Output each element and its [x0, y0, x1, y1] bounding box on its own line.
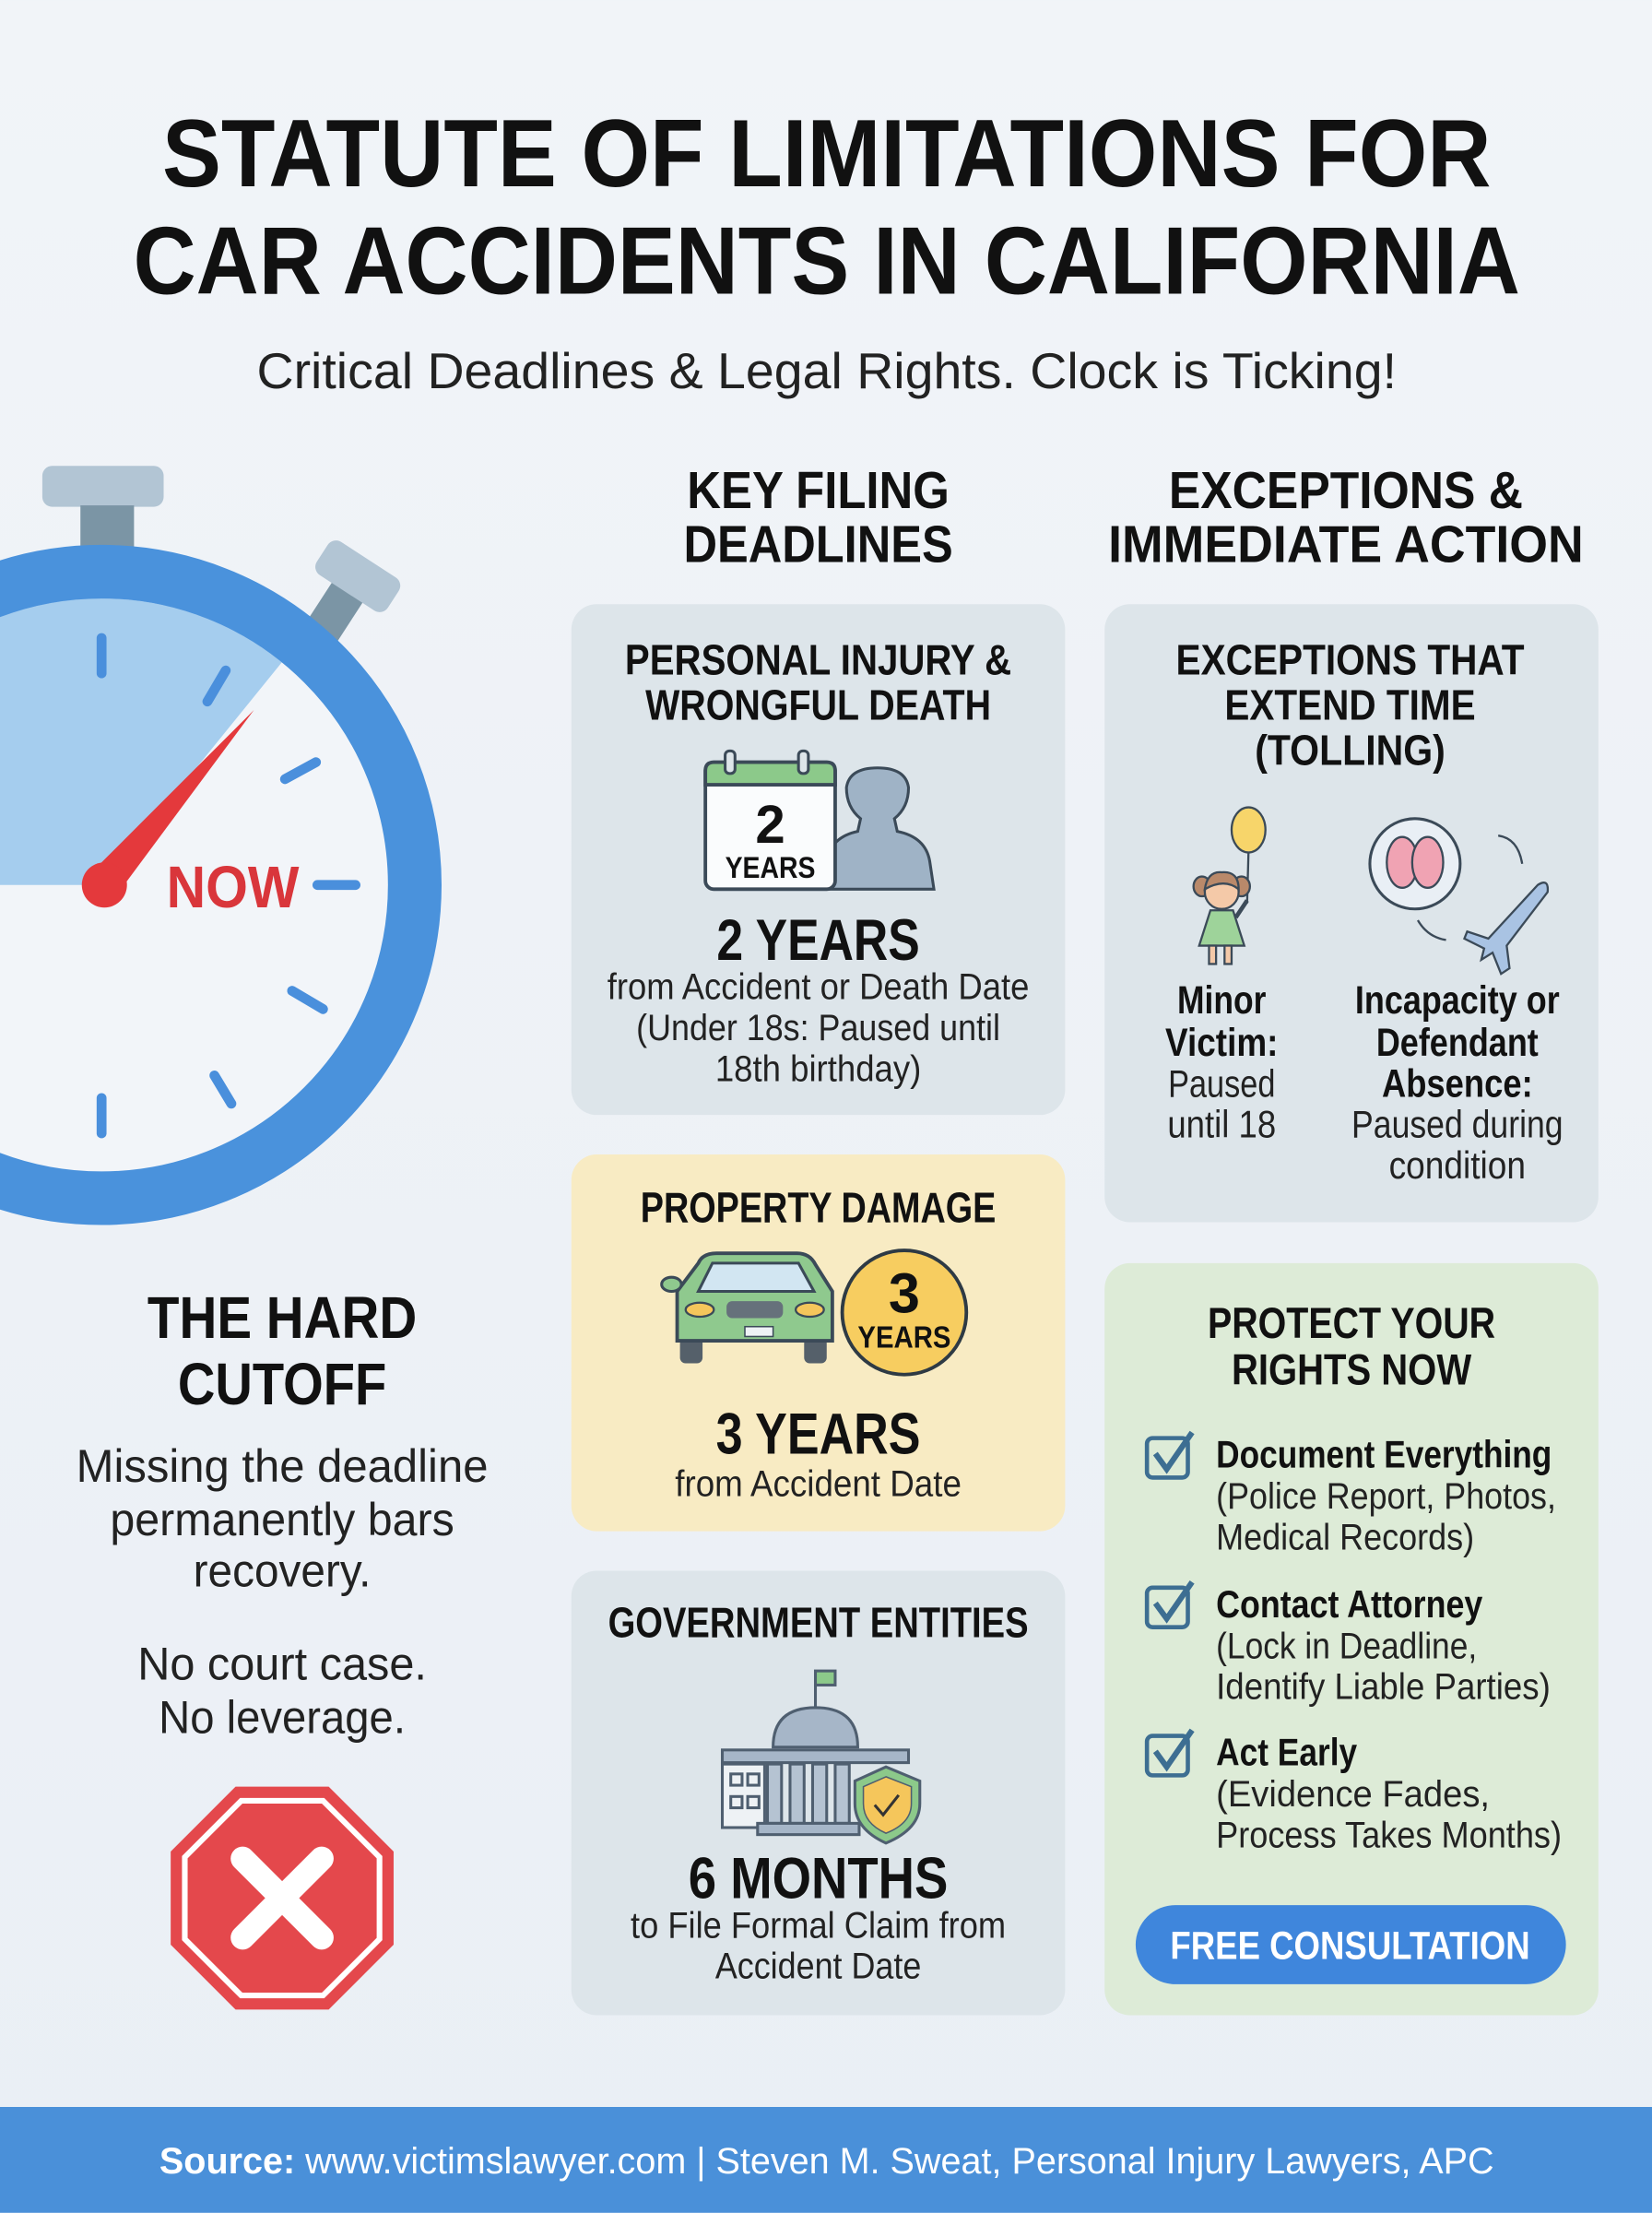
panel: government entities: GOVERNMENT ENTITIES — [608, 1598, 1029, 1646]
panel: exceptions (tolling): Paused during — [1351, 1104, 1564, 1146]
checklist item: act early: Act Early — [1216, 1732, 1357, 1774]
text block: the hard cutoff: Missing the deadline — [77, 1439, 488, 1492]
checklist item: contact attorney: (Lock in Deadline, — [1216, 1626, 1477, 1666]
panel: exceptions (tolling): Defendant — [1376, 1021, 1539, 1065]
panel: exceptions (tolling): Paused — [1168, 1062, 1275, 1105]
panel: exceptions (tolling): Victim: — [1165, 1021, 1278, 1065]
icon: brain and airplane — [1370, 819, 1548, 974]
icon: child with balloon — [1194, 808, 1266, 964]
icon: damaged car with 3 years badge: YEARS — [857, 1321, 950, 1355]
button: free consultation: FREE CONSULTATION — [1170, 1923, 1530, 1968]
icon: stop sign with X — [171, 1787, 394, 2009]
icon: damaged car with 3 years badge — [662, 1250, 966, 1375]
text block: the hard cutoff — [77, 1284, 488, 1743]
panel: personal injury: from Accident or Death Date — [608, 967, 1029, 1008]
panel: protect your rights now: RIGHTS NOW — [1232, 1345, 1471, 1394]
title: CAR ACCIDENTS IN CALIFORNIA — [134, 208, 1520, 315]
text block: the hard cutoff: THE HARD — [148, 1284, 417, 1351]
panel: exceptions (tolling): EXTEND TIME — [1224, 681, 1476, 729]
checklist item: act early: Process Takes Months) — [1216, 1815, 1562, 1855]
heading: exceptions & immediate action: IMMEDIATE ACTION — [1108, 515, 1584, 573]
panel: personal injury: WRONGFUL DEATH — [645, 681, 991, 729]
icon: calendar and person — [705, 751, 934, 889]
panel: exceptions (tolling): Incapacity or — [1355, 978, 1560, 1023]
icon: stopwatch — [0, 466, 415, 1198]
footer: source — [0, 2107, 1652, 2213]
heading: key filing deadlines — [683, 461, 953, 573]
panel: personal injury: 2 YEARS — [716, 908, 920, 973]
panel: exceptions (tolling): (TOLLING) — [1255, 727, 1446, 775]
icon: damaged car with 3 years badge: 3 — [889, 1261, 920, 1324]
heading: key filing deadlines: DEADLINES — [683, 515, 953, 573]
panel: personal injury: (Under 18s: Paused until — [636, 1008, 1000, 1048]
footer: source: Source: www.victimslawyer.com | Steven M. Sweat, Personal Injury Lawyers, APC — [159, 2141, 1494, 2182]
title: STATUTE OF LIMITATIONS FOR — [162, 101, 1492, 207]
heading: key filing deadlines: KEY FILING — [687, 461, 950, 519]
panel: exceptions (tolling): Minor — [1177, 978, 1267, 1023]
panel: protect your rights now: PROTECT YOUR — [1208, 1299, 1495, 1348]
panel: government entities — [572, 1570, 1065, 2016]
button: free consultation — [1136, 1905, 1566, 1984]
title — [134, 101, 1520, 315]
panel: property damage — [572, 1154, 1065, 1532]
panel: property damage: 3 YEARS — [716, 1402, 921, 1466]
heading: exceptions & immediate action — [1108, 461, 1584, 573]
checklist item: document everything: (Police Report, Photos, — [1216, 1476, 1556, 1517]
text block: the hard cutoff: No leverage. — [159, 1690, 406, 1743]
checklist item: contact attorney: Identify Liable Parties) — [1216, 1667, 1551, 1708]
text block: the hard cutoff: No court case. — [137, 1637, 427, 1689]
panel: property damage: from Accident Date — [675, 1463, 962, 1504]
checklist item: act early — [1147, 1730, 1562, 1855]
checklist item: contact attorney: Contact Attorney — [1216, 1583, 1482, 1626]
panel: government entities: to File Formal Claim from — [631, 1905, 1006, 1946]
text block: the hard cutoff: permanently bars — [110, 1493, 454, 1545]
text block: the hard cutoff: recovery. — [194, 1544, 371, 1596]
panel: exceptions (tolling) — [1104, 604, 1599, 1222]
checklist item: document everything: Document Everything — [1216, 1434, 1552, 1476]
panel: personal injury: PERSONAL INJURY & — [625, 636, 1011, 684]
panel: protect your rights now — [1104, 1263, 1599, 2016]
panel: government entities: 6 MONTHS — [689, 1847, 948, 1911]
text block: the hard cutoff: CUTOFF — [178, 1351, 386, 1417]
checklist item: contact attorney — [1147, 1582, 1551, 1708]
panel: exceptions (tolling): EXCEPTIONS THAT — [1176, 636, 1525, 684]
heading: exceptions & immediate action: EXCEPTIONS & — [1169, 461, 1523, 519]
panel: exceptions (tolling): until 18 — [1167, 1104, 1276, 1146]
checklist item: document everything: Medical Records) — [1216, 1518, 1474, 1558]
panel: personal injury: 18th birthday) — [715, 1048, 921, 1089]
icon: calendar and person: YEARS — [726, 851, 816, 884]
panel: government entities: Accident Date — [715, 1947, 921, 1987]
panel: exceptions (tolling): Absence: — [1382, 1061, 1533, 1106]
panel: personal injury — [572, 604, 1065, 1115]
subtitle: Critical Deadlines & Legal Rights. Clock is Ticking! — [257, 342, 1397, 399]
icon: government building with shield — [723, 1671, 920, 1843]
checklist item: act early: (Evidence Fades, — [1216, 1774, 1490, 1815]
panel: property damage: PROPERTY DAMAGE — [641, 1183, 996, 1231]
panel: exceptions (tolling): condition — [1389, 1144, 1526, 1187]
label: NOW: NOW — [167, 854, 300, 920]
icon: calendar and person: 2 — [755, 795, 785, 855]
checklist item: document everything — [1147, 1433, 1556, 1558]
